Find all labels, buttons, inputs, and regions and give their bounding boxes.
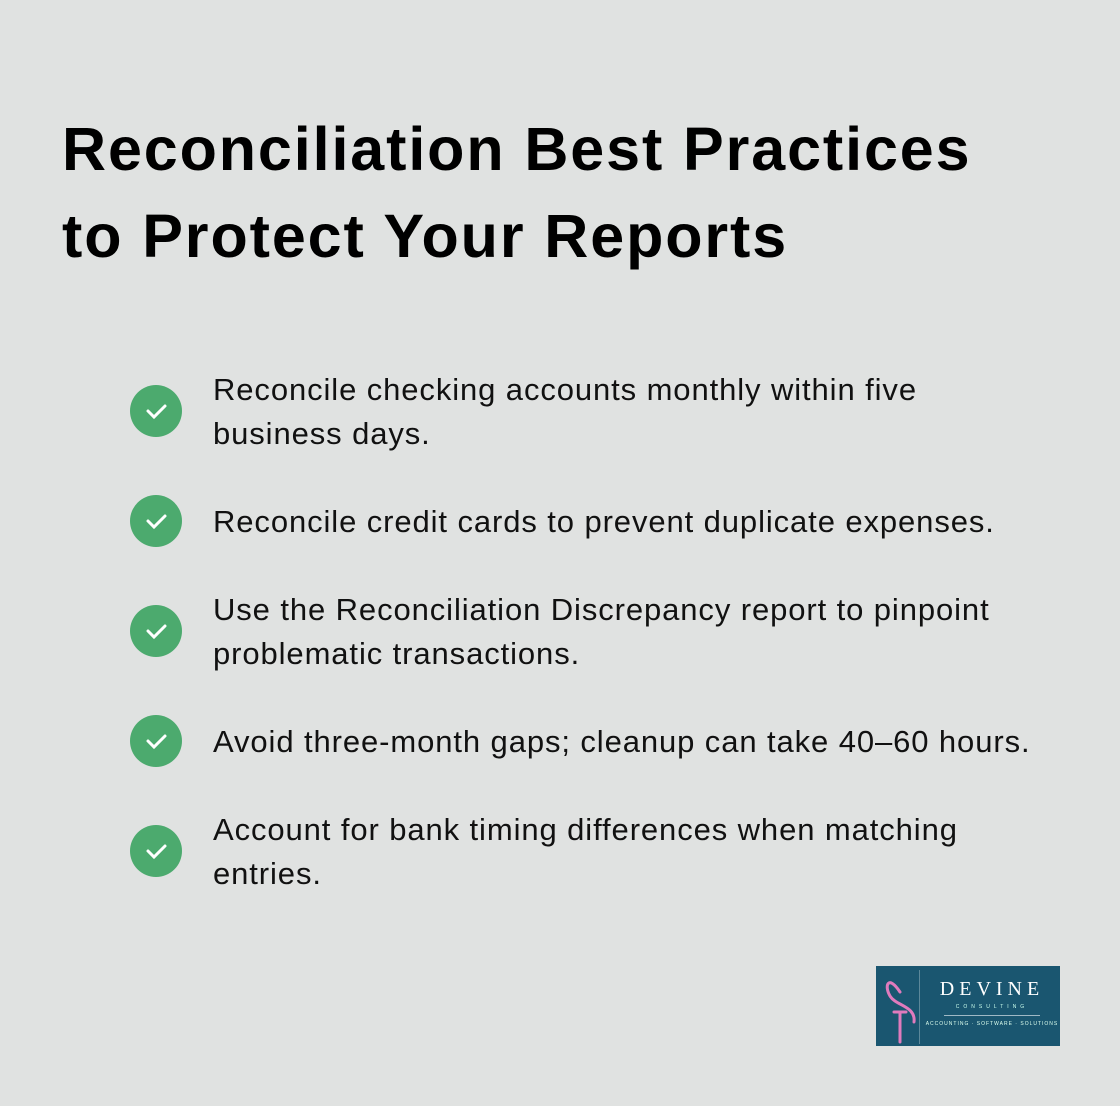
text: Reconcile checking accounts monthly within five	[213, 372, 917, 407]
icon: check	[130, 825, 182, 877]
icon: check	[130, 495, 182, 547]
text: entries.	[213, 856, 322, 891]
logo	[876, 966, 1060, 1046]
title: Reconciliation Best Practices	[62, 115, 971, 183]
logo text: DEVINE	[940, 978, 1044, 1000]
text: Use the Reconciliation Discrepancy report to pinpoint	[213, 592, 990, 627]
icon: flamingo	[886, 970, 920, 1044]
logo: CONSULTING	[956, 1004, 1028, 1010]
text	[213, 372, 917, 451]
item 5	[130, 812, 958, 891]
text: Reconcile credit cards to prevent duplicate expenses.	[213, 504, 995, 539]
item 3	[130, 592, 990, 671]
item 2	[130, 495, 995, 547]
item 4	[130, 715, 1030, 767]
text: Avoid three-month gaps; cleanup can take 40–60 hours.	[213, 724, 1030, 759]
logo: ACCOUNTING · SOFTWARE · SOLUTIONS	[926, 1021, 1058, 1027]
text	[213, 812, 958, 891]
icon: check	[130, 605, 182, 657]
text	[213, 592, 990, 671]
text: problematic transactions.	[213, 636, 580, 671]
title	[62, 115, 971, 270]
text: Account for bank timing differences when matching	[213, 812, 958, 847]
title: to Protect Your Reports	[62, 202, 788, 270]
icon: check	[130, 385, 182, 437]
text: business days.	[213, 416, 431, 451]
icon: check	[130, 715, 182, 767]
item 1	[130, 372, 917, 451]
